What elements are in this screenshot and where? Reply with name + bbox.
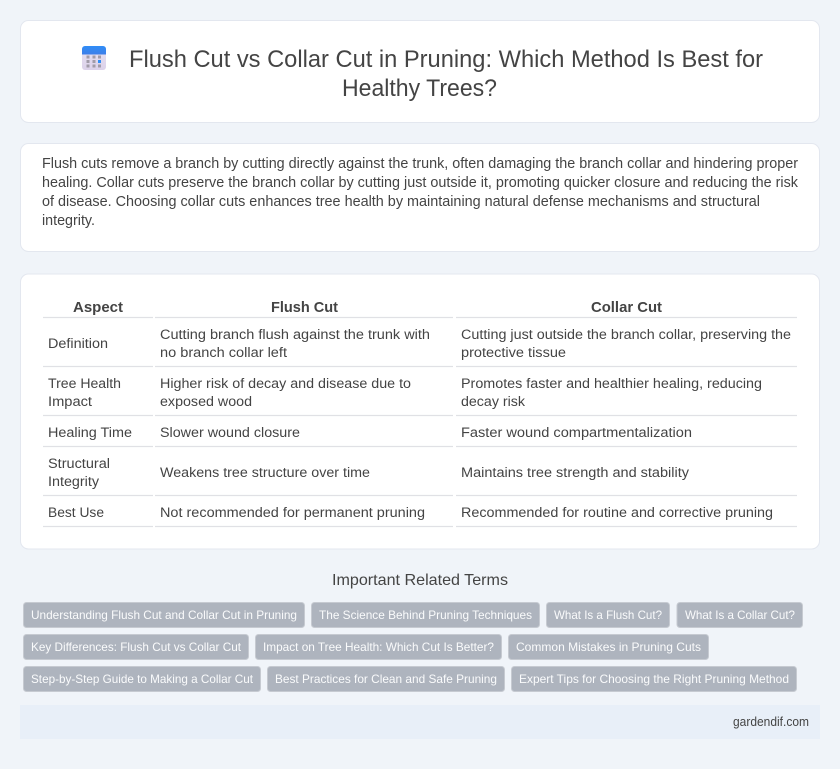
tag [508,634,708,660]
panel: related term tags [24,602,802,692]
row: definition: protective tissue [461,345,566,361]
panel: introduction [20,144,820,252]
row: definition: Cutting just outside the branch collar, preserving the [461,327,791,343]
footer: gardendif.com [733,714,809,729]
tag [24,666,260,692]
tag [24,634,248,660]
table header: Aspect [73,300,123,316]
row: tree health impact: decay risk [461,394,526,410]
row: best use: Not recommended for permanent pruning [160,505,425,521]
title: Flush Cut vs Collar Cut in Pruning: Which Method Is Best for [129,46,763,73]
tag [24,602,304,628]
tag [512,666,796,692]
title [129,46,763,102]
row: definition: Cutting branch flush against the trunk with [160,327,430,343]
heading: important related terms: Important Related Terms [332,572,508,589]
row: tree health impact: Higher risk of decay and disease due to [160,376,411,392]
row: structural integrity: Weakens tree structure over time [160,465,370,481]
row: definition: no branch collar left [160,345,287,361]
title: Healthy Trees? [342,75,497,102]
tag: Understanding Flush Cut and Collar Cut in Pruning [31,608,297,622]
row: best use: Best Use [48,505,104,521]
row: tree health impact: Promotes faster and healthier healing, reducing [461,376,762,392]
table header [43,300,797,318]
tag: Impact on Tree Health: Which Cut Is Better? [263,640,494,654]
row: tree health impact [43,376,797,416]
tag: Key Differences: Flush Cut vs Collar Cut [31,640,242,654]
text block: intro paragraph: integrity. [42,213,95,229]
row: tree health impact: exposed wood [160,394,252,410]
tag [256,634,502,660]
text block: intro paragraph: of disease. Choosing collar cuts enhances tree health by maintaining natural defense mechanisms and structural [42,194,760,210]
row: structural integrity [43,456,797,496]
row: tree health impact: Tree Health [48,376,121,392]
row: structural integrity: Structural [48,456,110,472]
row: healing time: Faster wound compartmentalization [461,425,692,441]
icon: calendar [82,46,106,70]
tag: What Is a Collar Cut? [685,608,795,622]
row: best use [43,505,797,526]
footer [20,705,820,739]
row: healing time: Slower wound closure [160,425,300,441]
tag [268,666,504,692]
tag [677,602,802,628]
tag: Step-by-Step Guide to Making a Collar Cut [31,672,254,686]
tag: What Is a Flush Cut? [554,608,662,622]
row: definition: Definition [48,336,108,352]
row: healing time [43,425,797,446]
row: structural integrity: Integrity [48,474,100,490]
tag [546,602,670,628]
text block: intro paragraph [42,156,799,229]
row: definition [43,327,797,366]
text block: intro paragraph: Flush cuts remove a branch by cutting directly against the trunk, often damaging the branch collar and hindering proper [42,156,798,172]
tag: Common Mistakes in Pruning Cuts [516,640,701,654]
panel: header card [20,20,820,122]
tag [312,602,540,628]
tag: Expert Tips for Choosing the Right Pruning Method [519,672,789,686]
tag: The Science Behind Pruning Techniques [319,608,532,622]
row: tree health impact: Impact [48,394,92,410]
row: healing time: Healing Time [48,425,132,441]
table header: Flush Cut [271,300,338,316]
tag: Best Practices for Clean and Safe Pruning [275,672,497,686]
row: structural integrity: Maintains tree strength and stability [461,465,690,481]
panel: comparison table [20,274,820,549]
text block: intro paragraph: healing. Collar cuts preserve the branch collar by cutting just outside it, promoting quicker closure and reducing the risk [42,175,799,191]
table header: Collar Cut [591,300,662,316]
row: best use: Recommended for routine and corrective pruning [461,505,773,521]
